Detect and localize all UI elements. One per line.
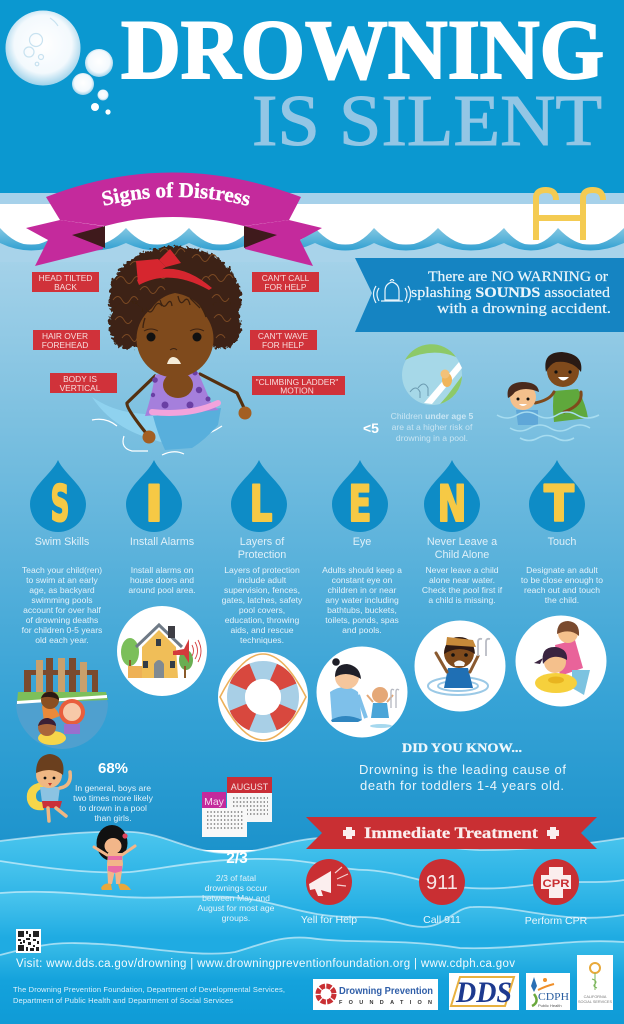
- pillar I: install alarms: Install Alarms: [130, 536, 195, 548]
- sign label: climbing ladder motion: "CLIMBING LADDER": [256, 377, 338, 387]
- treatment: yell for help: [301, 859, 357, 926]
- stat: boys 68%: In general, boys are: [75, 783, 151, 793]
- stat: under age 5: drowning in a pool.: [396, 433, 468, 443]
- banner: Signs of Distress: [26, 172, 322, 266]
- pillar E: eye: children in or near: [328, 585, 397, 595]
- calendar: August: AUGUST: [231, 782, 269, 792]
- credits: [13, 985, 285, 1005]
- did you know: [359, 740, 566, 793]
- sign label: hair over forehead: HAIR OVER: [42, 331, 88, 341]
- logo: social services: [577, 955, 613, 1010]
- visit links: Visit: www.dds.ca.gov/drowning | www.drowningpreventionfoundation.org | www.cdph.ca.gov: [16, 958, 515, 970]
- pillar N: never leave a child alone: Child Alone: [435, 549, 489, 561]
- callout: no warning sounds: splashing SOUNDS associated: [411, 285, 611, 301]
- qr code: [16, 929, 41, 953]
- pillar L: layers of protection: gates, latches, safety: [222, 595, 303, 605]
- pillar N: never leave a child alone: Never Leave a: [427, 536, 497, 548]
- pillar S: swim skills: old each year.: [35, 635, 89, 645]
- dress: [145, 371, 219, 416]
- pillar N: never leave a child alone: alone near water.: [429, 575, 495, 585]
- drop S: [30, 460, 86, 533]
- skirt in water: [153, 408, 221, 450]
- logo: CDPH: Public Health: [538, 1003, 562, 1008]
- pillar L: layers of protection: Protection: [238, 549, 286, 561]
- bubbles: [6, 10, 113, 115]
- stat: boys 68%: to drown in a pool: [79, 803, 147, 813]
- illustration: house with alarm: [117, 606, 207, 696]
- illustration: girl in swimsuit: [94, 825, 135, 890]
- banner: Signs of Distress: Signs of Distress: [102, 182, 250, 206]
- icon: bell: [374, 280, 410, 303]
- logo: drowning prevention foundation: Drowning Prevention: [339, 986, 433, 997]
- logo: social services: SOCIAL SERVICES: [578, 1000, 612, 1004]
- stat: 2/3: drownings occur: [205, 883, 267, 893]
- sign label: can't wave for help: FOR HELP: [262, 340, 304, 350]
- pillar T: touch: [516, 460, 606, 706]
- background: white pool wall: [0, 204, 624, 244]
- arms and hands: [127, 374, 245, 433]
- pillar E: eye: Eye: [353, 536, 371, 548]
- sign label: can't call for help: CAN'T CALL: [262, 273, 310, 283]
- pillar T: touch: Designate an adult: [526, 565, 598, 575]
- sign label: head tilted back: BACK: [54, 282, 77, 292]
- stat: under age 5: Children under age 5: [391, 411, 474, 421]
- sign label: head tilted back: [32, 272, 99, 292]
- calendars: [202, 777, 272, 837]
- pillar L: layers of protection: [218, 460, 308, 742]
- callout: no warning sounds: with a drowning accident.: [437, 301, 611, 317]
- logo: DDS: DDS: [455, 976, 512, 1009]
- treatment: call 911: 911: [426, 872, 458, 894]
- logo: CDPH: CDPH: [538, 991, 569, 1003]
- pool ladder: [536, 190, 603, 240]
- hair: [109, 246, 241, 350]
- pillar E: eye: constant eye on: [332, 575, 393, 585]
- stat: under age 5: are at a higher risk of: [392, 422, 473, 432]
- did you know: Drowning is the leading cause of: [359, 762, 566, 777]
- pillar S: swim skills: Teach your child(ren): [22, 565, 102, 575]
- calendar: May: May: [204, 796, 225, 808]
- pillar N: never leave a child alone: [414, 460, 506, 712]
- pillar N: never leave a child alone: Never leave a child: [425, 565, 499, 575]
- sign label: head tilted back: HEAD TILTED: [39, 273, 92, 283]
- illustration: adult and child swimming: [497, 352, 599, 440]
- drop T: [529, 460, 585, 533]
- credits: The Drowning Prevention Foundation, Department of Developmental Services,: [13, 985, 285, 994]
- logo: drowning prevention foundation: [313, 979, 438, 1010]
- stat: boys 68%: [73, 760, 154, 823]
- pillar E: eye: bathtubs, buckets,: [327, 605, 397, 615]
- sign label: body is vertical: BODY IS: [63, 374, 97, 384]
- title: IS SILENT: IS SILENT: [252, 80, 602, 161]
- cross left: [343, 827, 355, 839]
- stat: boys 68%: two times more likely: [73, 793, 154, 803]
- pillar E: eye: Adults should keep a: [322, 565, 402, 575]
- drop S: S: [50, 475, 70, 533]
- pillar L: layers of protection: pool covers,: [239, 605, 285, 615]
- pillar L: layers of protection: include adult: [238, 575, 287, 585]
- stat: 2/3: [198, 850, 275, 923]
- drop N: [424, 460, 480, 533]
- logo: CDPH: [526, 973, 570, 1010]
- headband: [136, 249, 212, 290]
- stat: under age 5: <5: [363, 420, 379, 436]
- stat: 2/3: August for most age: [198, 903, 275, 913]
- pillar S: swim skills: account for over half: [23, 605, 102, 615]
- background: light band: [0, 193, 624, 204]
- illustration: child in water: [414, 620, 506, 712]
- sign label: can't call for help: FOR HELP: [265, 282, 307, 292]
- pillar S: swim skills: Swim Skills: [35, 536, 90, 548]
- drop L: L: [250, 475, 272, 533]
- callout: no warning sounds: [355, 258, 624, 332]
- stat: 2/3: 2/3 of fatal: [216, 873, 256, 883]
- treatment: perform cpr: Perform CPR: [525, 915, 588, 927]
- drop E: [332, 460, 388, 533]
- belt: [152, 403, 218, 413]
- treatment: perform cpr: CPR: [542, 878, 570, 890]
- pillar L: layers of protection: supervision, fences,: [224, 585, 300, 595]
- pillar L: layers of protection: aids, and rescue: [230, 625, 294, 635]
- treatment: yell for help: Yell for Help: [301, 914, 357, 926]
- background: pool gradient: [0, 240, 624, 850]
- pillar L: layers of protection: education, throwing: [225, 615, 299, 625]
- drop I: I: [145, 475, 163, 533]
- eyes and mouth: [146, 332, 156, 342]
- sign label: hair over forehead: [33, 330, 100, 350]
- sign label: can't wave for help: [250, 330, 317, 350]
- drop L: [231, 460, 287, 533]
- pillar I: install alarms: Install alarms on: [131, 565, 194, 575]
- sign label: can't wave for help: CAN'T WAVE: [258, 331, 309, 341]
- stat: under age 5: [363, 411, 474, 443]
- pillar E: eye: and pools.: [342, 625, 382, 635]
- treatment: call 911: [419, 859, 465, 926]
- did you know: DID YOU KNOW...: [402, 740, 522, 755]
- stat: boys 68%: 68%: [98, 760, 128, 777]
- illustration: adult touching child in float: [516, 616, 606, 706]
- pillar S: swim skills: [16, 460, 108, 749]
- ribbon: immediate treatment: [306, 817, 597, 849]
- drop I: [126, 460, 182, 533]
- stat: 2/3: groups.: [222, 913, 250, 923]
- treatment: perform cpr: [525, 859, 588, 927]
- pillar S: swim skills: age, as backyard: [29, 585, 95, 595]
- background: sky blue top: [0, 0, 624, 194]
- pillar I: install alarms: around pool area.: [128, 585, 196, 595]
- sign label: climbing ladder motion: [252, 376, 345, 396]
- pillar I: install alarms: [117, 460, 207, 696]
- callout: no warning sounds: There are NO WARNING or: [428, 269, 608, 285]
- sign label: hair over forehead: FOREHEAD: [42, 340, 88, 350]
- pillar S: swim skills: for children 0-5 years: [22, 625, 102, 635]
- logo: social services: CALIFORNIA: [584, 995, 607, 999]
- face: [136, 300, 214, 378]
- pillar E: eye: toilets, ponds, spas: [325, 615, 399, 625]
- did you know: death for toddlers 1-4 years old.: [360, 778, 564, 793]
- stat: boys 68%: than girls.: [94, 813, 132, 823]
- pillar L: layers of protection: techniques.: [240, 635, 284, 645]
- water waves: [0, 832, 624, 1024]
- pillar E: eye: [316, 460, 408, 738]
- pillar S: swim skills: of drowning deaths: [26, 615, 98, 625]
- illustration: boy with float: [27, 754, 70, 821]
- pillar T: touch: Touch: [548, 536, 576, 548]
- cross right: [547, 827, 559, 839]
- stat: 2/3: between May and: [202, 893, 270, 903]
- pillar S: swim skills: swimming pools: [31, 595, 93, 605]
- scalloped water surface: [0, 228, 624, 262]
- title: DROWNING: DROWNING: [121, 3, 604, 97]
- sign label: body is vertical: VERTICAL: [60, 383, 101, 393]
- treatment: call 911: Call 911: [423, 914, 461, 926]
- logo: drowning prevention foundation: FOUNDATION: [339, 1000, 432, 1006]
- drop N: N: [438, 475, 466, 533]
- sign label: body is vertical: [50, 373, 117, 393]
- illustration: kids by fence: [16, 658, 108, 749]
- pillar L: layers of protection: Layers of: [240, 536, 285, 548]
- illustration: life ring: [218, 652, 308, 742]
- pillar I: install alarms: house doors and: [130, 575, 194, 585]
- pillar L: layers of protection: Layers of protection: [224, 565, 300, 575]
- pillar T: touch: reach out and touch: [524, 585, 600, 595]
- pillar N: never leave a child alone: a child is missing.: [428, 595, 496, 605]
- pillar T: touch: to be close enough to: [521, 575, 603, 585]
- sign label: climbing ladder motion: MOTION: [280, 386, 314, 396]
- illustration: girl in distress: [92, 246, 252, 455]
- pillar T: touch: the child.: [545, 595, 579, 605]
- pillar E: eye: any water including: [325, 595, 399, 605]
- stat: 2/3: 2/3: [226, 850, 248, 867]
- drop T: T: [544, 475, 574, 533]
- ribbon: immediate treatment: Immediate Treatment: [364, 825, 539, 842]
- illustration: pool circle: [402, 344, 462, 405]
- illustration: adult watching child: [316, 646, 408, 738]
- credits: Department of Public Health and Department of Social Services: [13, 996, 233, 1005]
- drop E: E: [348, 475, 372, 533]
- pillar S: swim skills: to swim at an early: [26, 575, 99, 585]
- pillar N: never leave a child alone: Check the pool first if: [422, 585, 503, 595]
- water splash: [92, 397, 175, 445]
- sign label: can't call for help: [252, 272, 319, 292]
